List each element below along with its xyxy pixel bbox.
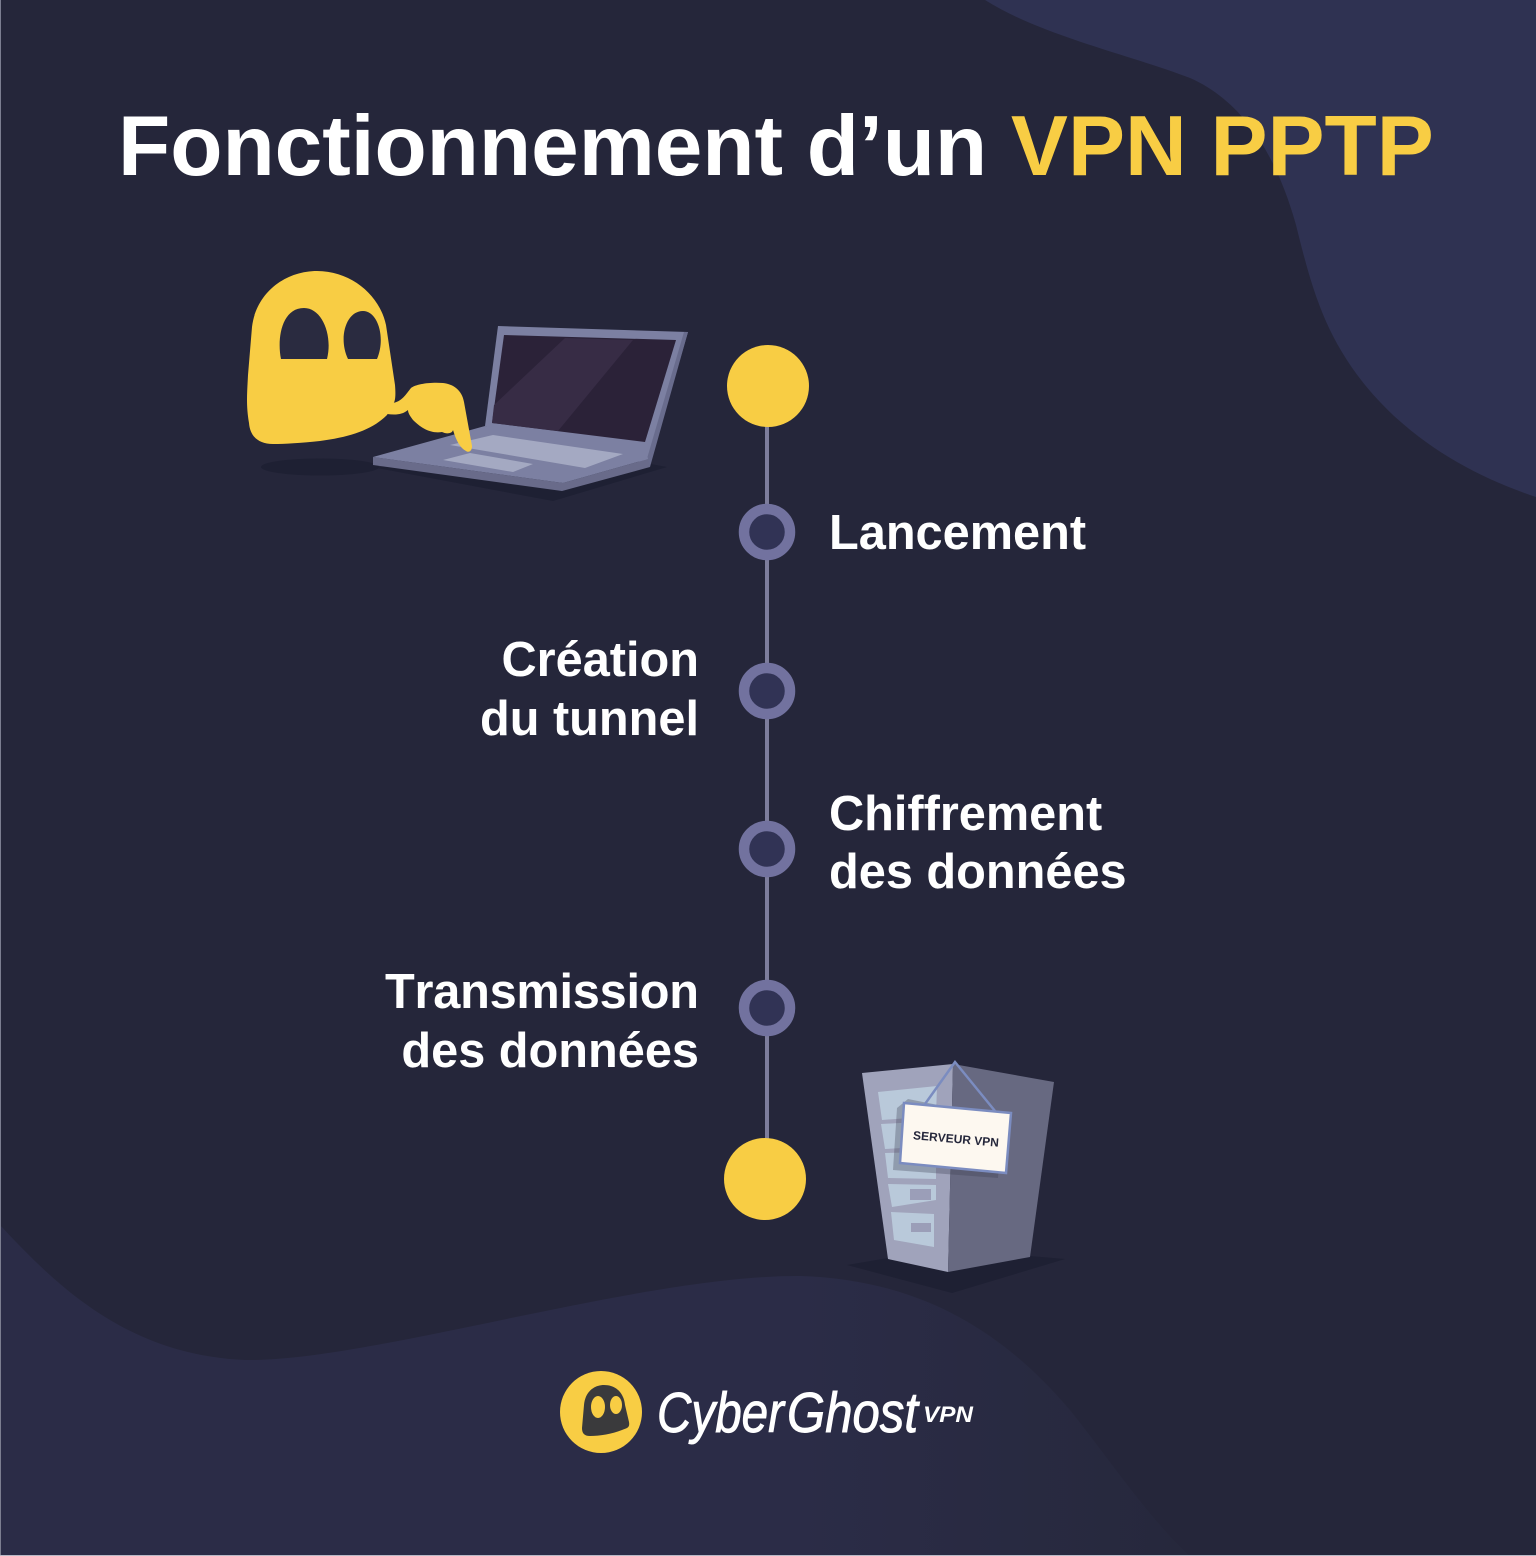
- logo ghost: [582, 1385, 629, 1436]
- ghost shadow: [261, 458, 379, 476]
- sign text: SERVEUR VPN: [913, 1128, 999, 1150]
- timeline end dot: [724, 1138, 806, 1220]
- logo wordmark: Cyber: [657, 1381, 786, 1445]
- illustration: ghost at laptop: [247, 271, 688, 501]
- sign: [900, 1103, 1011, 1173]
- ghost body: [247, 271, 395, 444]
- step marker: Transmission des données: [744, 985, 790, 1031]
- background blob: top right: [985, 0, 1536, 497]
- timeline: [724, 345, 809, 1220]
- logo VPN: VPN: [923, 1402, 974, 1427]
- label: Transmission des données: [385, 965, 699, 1078]
- step marker: Lancement: [744, 509, 790, 555]
- laptop shadow: [377, 462, 667, 501]
- step marker: Chiffrement des données: [744, 826, 790, 872]
- drawer handles: [910, 1189, 931, 1232]
- label: Transmission des données: des données: [401, 1024, 699, 1078]
- label: Création du tunnel: du tunnel: [480, 692, 699, 746]
- ghost hand: [387, 383, 472, 452]
- server shadow: [847, 1256, 1065, 1293]
- sign shadow: [893, 1099, 1003, 1178]
- logo wordmark: [657, 1381, 920, 1445]
- laptop: [373, 326, 688, 491]
- label: Lancement: Lancement: [829, 506, 1086, 560]
- sign strings: [925, 1062, 995, 1111]
- label: Création du tunnel: Création: [502, 633, 699, 687]
- title: Fonctionnement d’un VPN PPTP: [118, 99, 1434, 194]
- logo: CyberGhost VPN: [560, 1371, 974, 1453]
- illustration: VPN server: [847, 1062, 1065, 1293]
- label: Chiffrement des données: [829, 787, 1127, 899]
- step marker: Création du tunnel: [744, 668, 790, 714]
- logo circle: [560, 1371, 642, 1453]
- server left face: [862, 1064, 953, 1272]
- label: Chiffrement des données: des données: [829, 845, 1127, 899]
- logo wordmark: Ghost: [787, 1381, 920, 1445]
- label: Chiffrement des données: Chiffrement: [829, 787, 1102, 841]
- label: Transmission des données: Transmission: [385, 965, 699, 1019]
- background blob: bottom: [0, 1225, 1190, 1556]
- logo ghost eyes: [591, 1396, 605, 1418]
- timeline line: [765, 386, 769, 1179]
- timeline start dot: [727, 345, 809, 427]
- ghost eyes: [280, 308, 381, 359]
- server right face: [948, 1064, 1054, 1272]
- label: Création du tunnel: [480, 633, 699, 746]
- server drawers: [878, 1086, 937, 1247]
